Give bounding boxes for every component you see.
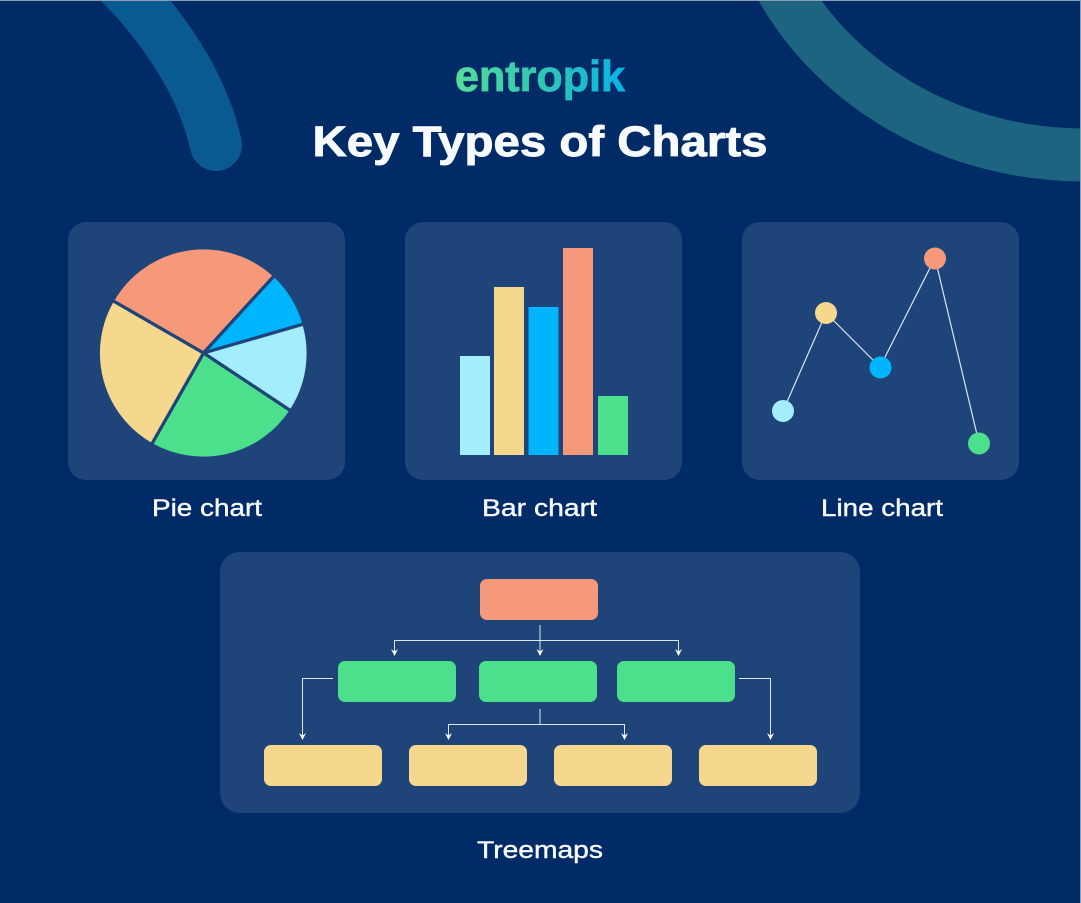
bar: blue: [528, 307, 558, 455]
title: Key Types of Charts: [312, 118, 768, 166]
bar: light blue: [460, 356, 490, 455]
logo: entropik: entropik: [455, 52, 626, 101]
connectors: tree links: [302, 625, 770, 736]
point: green: [968, 432, 990, 454]
slice: green: [152, 353, 291, 458]
point: salmon: [924, 248, 946, 270]
panel: pie chart: [68, 222, 345, 480]
node: green 3: [617, 661, 735, 702]
bar: salmon: [563, 248, 593, 455]
slice: salmon: [112, 248, 274, 353]
point: yellow: [815, 302, 837, 324]
node: yellow 4: [699, 745, 817, 786]
node: green 1: [338, 661, 456, 702]
slice: yellow: [98, 300, 204, 444]
decorative arc: top right: [765, 0, 1081, 155]
arrowheads: [299, 649, 774, 740]
point: blue: [870, 356, 892, 378]
node: root: [480, 579, 598, 620]
pie chart graphic: [98, 248, 308, 458]
panel: bar chart: [405, 222, 682, 480]
node: yellow 2: [409, 745, 527, 786]
bar: green: [598, 396, 628, 455]
bar: yellow: [494, 287, 524, 455]
panel: treemap: [220, 552, 860, 813]
slice: light blue: [204, 324, 308, 411]
node: yellow 3: [554, 745, 672, 786]
label: pie chart: Pie chart: [152, 495, 262, 522]
node: yellow 1: [264, 745, 382, 786]
panel: line chart: [742, 222, 1019, 480]
point: light blue: [772, 400, 794, 422]
slice: blue: [204, 276, 304, 353]
decorative arc: top left: [122, 0, 216, 145]
label: bar chart: Bar chart: [482, 495, 597, 522]
label: line chart: Line chart: [821, 495, 943, 522]
label: treemaps: Treemaps: [477, 837, 603, 864]
line series: [783, 258, 979, 443]
node: green 2: [479, 661, 597, 702]
